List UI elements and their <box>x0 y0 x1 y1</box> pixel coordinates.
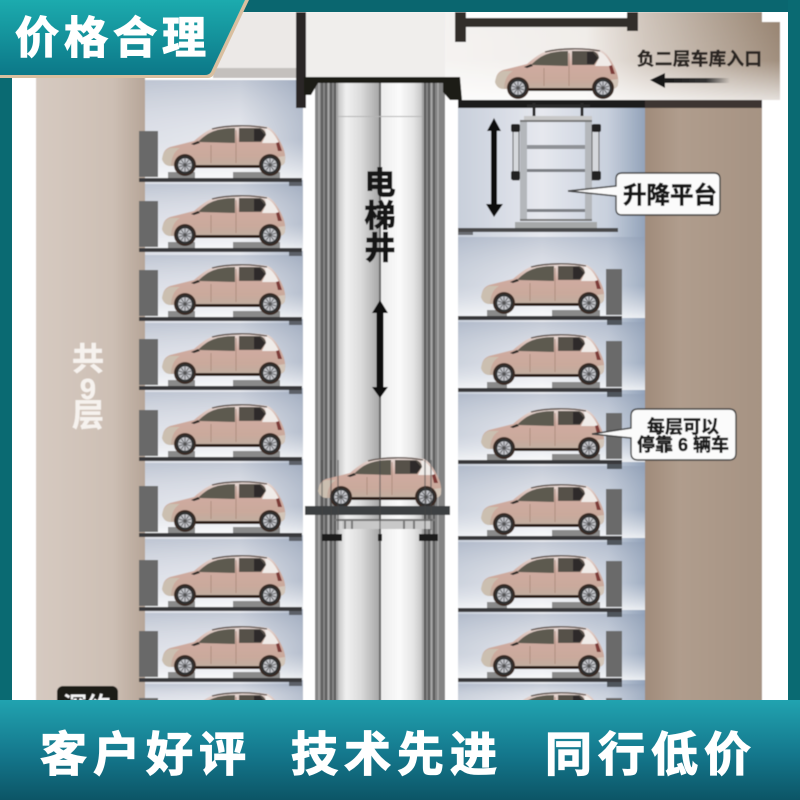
label: garage entrance: 负二层车库入口 <box>637 49 762 69</box>
label: nine floors <box>72 341 104 433</box>
callout: lifting platform: 升降平台 <box>623 181 717 208</box>
elevator shaft <box>315 80 445 710</box>
bottom slogans <box>40 728 757 781</box>
label: nine floors: 层 <box>72 397 104 433</box>
elevator car <box>318 457 441 508</box>
bottom banner <box>0 700 800 800</box>
bottom slogans: 客户好评 <box>40 728 252 781</box>
callout: lifting platform <box>568 173 720 215</box>
left parking floors <box>139 131 302 753</box>
callout: six cars per floor <box>592 409 736 460</box>
label: nine floors: 共 <box>72 341 104 377</box>
arrow: elevator travel <box>372 300 388 398</box>
upper floor structure <box>296 12 462 108</box>
bottom slogans: 同行低价 <box>545 728 757 781</box>
top-left banner <box>0 0 249 78</box>
top-left banner: 价格合理 <box>15 14 211 63</box>
right column cars <box>481 263 604 743</box>
label: depth tag: 深约 <box>63 693 111 720</box>
garage floor slab <box>458 100 762 108</box>
bottom slogans: 技术先进 <box>291 728 503 781</box>
garage entrance level <box>445 12 788 102</box>
arrow: garage entrance <box>650 73 730 88</box>
label: elevator shaft: 梯 <box>364 199 396 234</box>
right parking floors <box>458 269 622 754</box>
label: elevator shaft: 电 <box>364 166 396 201</box>
upper floor background <box>213 12 446 78</box>
arrow: lifting platform travel <box>486 118 503 217</box>
lifting platform <box>458 103 618 235</box>
label: depth tag <box>57 686 118 726</box>
right parking bay <box>458 108 645 710</box>
left wall <box>36 70 145 710</box>
elevator platform <box>305 460 450 530</box>
left parking bay <box>145 80 303 710</box>
right wall <box>645 100 762 710</box>
top car at entrance <box>495 48 618 99</box>
label: elevator shaft <box>364 166 396 266</box>
callout: six cars per floor: 每层可以 <box>647 417 719 437</box>
left column cars <box>162 125 285 743</box>
label: elevator shaft: 井 <box>364 231 396 266</box>
label: nine floors: 9 <box>80 374 96 406</box>
callout: six cars per floor: 停靠 6 辆车 <box>637 434 729 455</box>
